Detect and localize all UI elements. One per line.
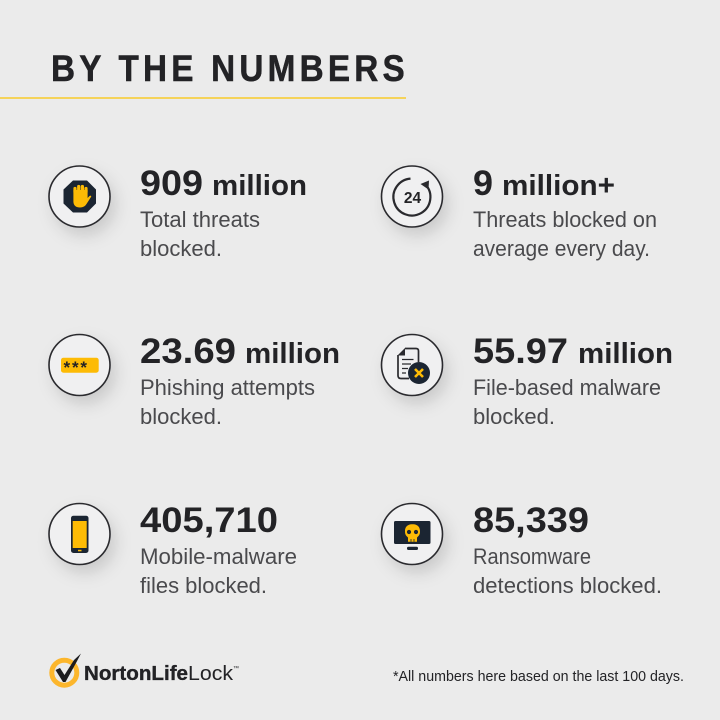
stat: total threats: Total threats xyxy=(140,207,260,232)
stat: file malware: million xyxy=(578,338,673,370)
stat: total threats: blocked. xyxy=(140,236,222,261)
icon: skull monitor xyxy=(382,504,442,564)
stat: phishing: blocked. xyxy=(140,404,222,429)
stat: mobile malware: 405,710 xyxy=(140,501,278,540)
stat: ransomware: Ransomware xyxy=(473,544,591,569)
title: BY THE NUMBERS xyxy=(51,48,405,89)
icon: infected file xyxy=(382,334,442,396)
icon: stop hand xyxy=(49,166,110,227)
stat: threats per day: average every day. xyxy=(473,236,650,261)
stat: total threats xyxy=(49,164,307,261)
footnote: *All numbers here based on the last 100 days. xyxy=(393,669,684,685)
stat: threats per day xyxy=(382,164,657,261)
stat: ransomware: detections blocked. xyxy=(473,573,662,598)
stat: phishing: million xyxy=(245,338,340,370)
stat: phishing: Phishing attempts xyxy=(140,375,315,400)
icon: password field xyxy=(49,334,110,396)
stat: phishing xyxy=(49,332,340,429)
icon: 24 hours xyxy=(382,166,442,227)
icon: 24 hours: 24 xyxy=(404,190,421,207)
stat: file malware xyxy=(382,332,673,429)
logo: NortonLifeLock: ™ xyxy=(233,665,239,672)
stat: phishing: 23.69 xyxy=(140,332,236,371)
icon: password field: *** xyxy=(64,358,87,377)
logo: NortonLifeLock: NortonLife xyxy=(84,663,188,685)
stat: total threats: 909 xyxy=(140,164,203,203)
stat: threats per day: million+ xyxy=(502,170,615,202)
logo: NortonLifeLock xyxy=(52,654,239,685)
stat: mobile malware: files blocked. xyxy=(140,573,267,598)
stat: mobile malware: Mobile-malware xyxy=(140,544,297,569)
stat: threats per day: 9 xyxy=(473,164,493,203)
stat: mobile malware xyxy=(49,501,297,598)
stat: file malware: File-based malware xyxy=(473,375,661,400)
logo: NortonLifeLock: Lock xyxy=(188,663,234,685)
icon: phone xyxy=(49,504,110,564)
stat: threats per day: Threats blocked on xyxy=(473,207,657,232)
stat: ransomware: 85,339 xyxy=(473,501,589,540)
icon: check badge xyxy=(52,654,81,685)
stat: total threats: million xyxy=(212,170,307,202)
title underline xyxy=(0,97,406,99)
stat: ransomware xyxy=(382,501,662,598)
stat: file malware: blocked. xyxy=(473,404,555,429)
stat: file malware: 55.97 xyxy=(473,332,568,371)
